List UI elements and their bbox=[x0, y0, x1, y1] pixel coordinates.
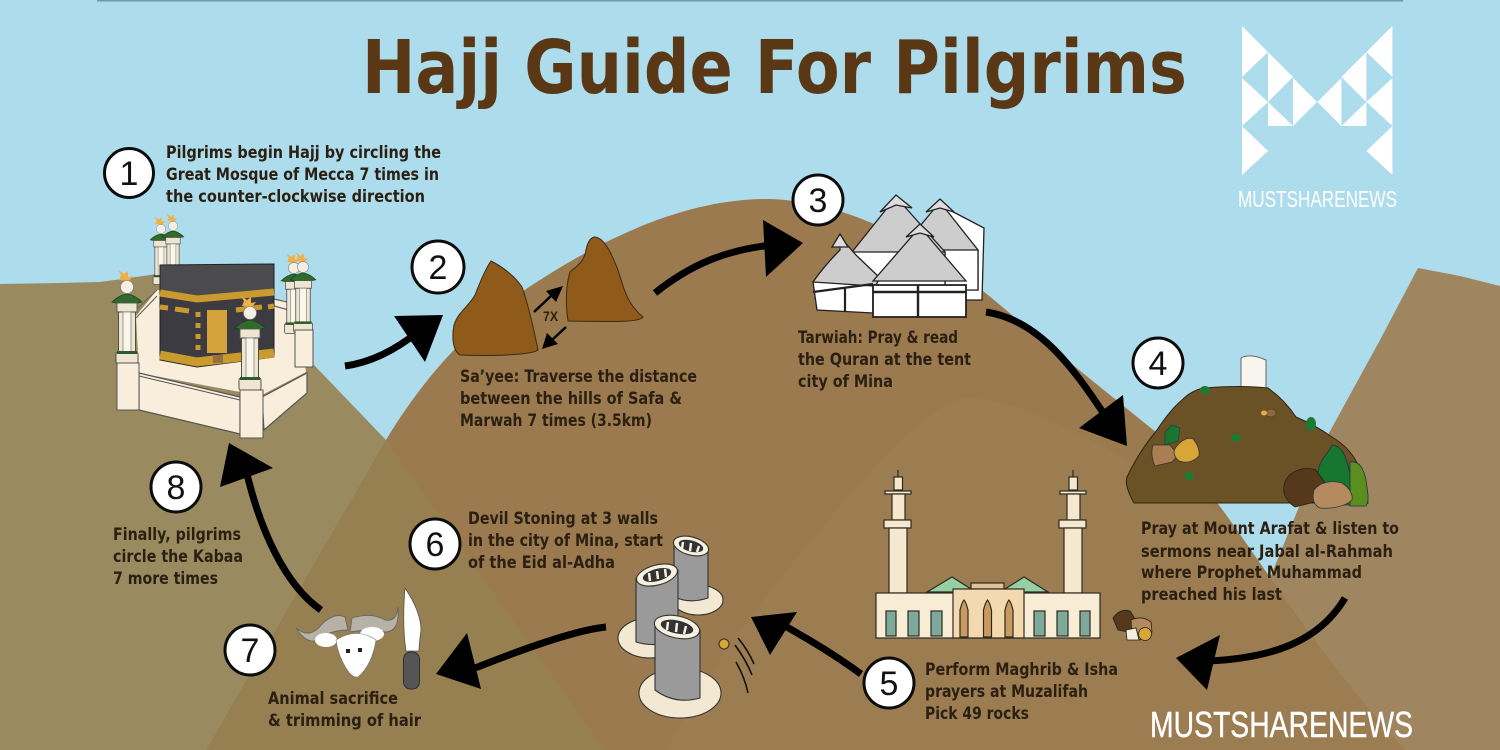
icon: Mount Arafat bbox=[1126, 356, 1368, 508]
step 3 number bbox=[793, 175, 843, 225]
arrow 2 to 3 bbox=[655, 220, 803, 293]
step 8 text: 7 more times bbox=[113, 569, 218, 588]
step 3 text: Tarwiah: Pray & read bbox=[798, 328, 958, 347]
icon: tent city of Mina bbox=[813, 195, 984, 317]
step 1 number: 1 bbox=[120, 155, 138, 193]
arrow 5 to 6 bbox=[751, 612, 861, 674]
step 1 text: Great Mosque of Mecca 7 times in bbox=[166, 165, 439, 184]
arrow 7 to 8 bbox=[220, 443, 321, 610]
step 2 number: 2 bbox=[429, 249, 447, 287]
cube bbox=[160, 264, 274, 296]
step 5 number: 5 bbox=[880, 665, 898, 703]
step 3 text: city of Mina bbox=[798, 372, 893, 391]
logo: MustShareNews emblem bbox=[1238, 26, 1397, 212]
step 1 number bbox=[104, 148, 154, 198]
step 5 text: prayers at Muzalifah bbox=[925, 682, 1088, 701]
step 6 number bbox=[410, 519, 460, 569]
logo: MustShareNews emblem: MUSTSHARENEWS bbox=[1238, 186, 1397, 212]
logo: MustShareNews wordmark: MUSTSHARENEWS bbox=[1150, 704, 1413, 745]
step 1 text: Pilgrims begin Hajj by circling the bbox=[166, 143, 441, 162]
step 6 text bbox=[468, 509, 663, 572]
icon: sacrificial animal and knife bbox=[296, 588, 421, 689]
step 2 text: between the hills of Safa & bbox=[460, 389, 682, 408]
step 4 number: 4 bbox=[1149, 345, 1167, 383]
step 6 text: in the city of Mina, start bbox=[468, 531, 663, 550]
title: Hajj Guide For Pilgrims bbox=[362, 25, 1187, 111]
step 7 text: Animal sacrifice bbox=[268, 689, 398, 708]
step 7 text: & trimming of hair bbox=[268, 711, 422, 730]
step 7 number bbox=[225, 625, 275, 675]
step 5 text: Pick 49 rocks bbox=[925, 704, 1029, 723]
arrow 1 to 2 bbox=[345, 315, 443, 366]
left hill bbox=[0, 268, 420, 750]
step 1 text bbox=[166, 143, 441, 206]
step 8 number bbox=[151, 462, 201, 512]
step 1 text: the counter-clockwise direction bbox=[166, 187, 425, 206]
step 4 text: preached his last bbox=[1141, 585, 1282, 604]
arrow 6 to 7 bbox=[436, 627, 606, 689]
lower inner hill bbox=[667, 398, 1405, 750]
step 4 text bbox=[1141, 519, 1399, 604]
step 6 text: of the Eid al-Adha bbox=[468, 553, 615, 572]
icon: hills of Safa and Marwah: 7X bbox=[543, 308, 559, 324]
step 5 text: Perform Maghrib & Isha bbox=[925, 660, 1118, 679]
step 6 text: Devil Stoning at 3 walls bbox=[468, 509, 658, 528]
step 7 number: 7 bbox=[241, 632, 259, 670]
step 8 text: Finally, pilgrims bbox=[113, 525, 241, 544]
step 8 text: circle the Kabaa bbox=[113, 547, 243, 566]
step 3 text: the Quran at the tent bbox=[798, 350, 971, 369]
icon: mosque at Muzdalifah bbox=[876, 470, 1100, 638]
front olive hill bbox=[206, 440, 605, 750]
step 3 number: 3 bbox=[809, 182, 827, 220]
step 4 number bbox=[1133, 338, 1183, 388]
step 7 text bbox=[268, 689, 422, 730]
step 3 text bbox=[798, 328, 971, 391]
icon: stoning walls bbox=[618, 533, 754, 718]
step 4 text: where Prophet Muhammad bbox=[1141, 563, 1362, 582]
arrow 4 to 5 bbox=[1176, 598, 1345, 690]
step 8 text bbox=[113, 525, 243, 588]
walls bbox=[139, 373, 240, 434]
step 2 text: Sa’yee: Traverse the distance bbox=[460, 367, 697, 386]
step 6 number: 6 bbox=[426, 526, 444, 564]
step 2 number bbox=[412, 241, 464, 293]
step 8 number: 8 bbox=[167, 469, 185, 507]
arrow 3 to 4 bbox=[986, 312, 1127, 446]
step 4 text: Pray at Mount Arafat & listen to bbox=[1141, 519, 1399, 538]
icon: hills of Safa and Marwah bbox=[453, 237, 643, 355]
step 5 number bbox=[864, 658, 914, 708]
icon: pile of rocks bbox=[1113, 610, 1152, 640]
step 2 text: Marwah 7 times (3.5km) bbox=[460, 411, 652, 430]
step 4 text: sermons near Jabal al-Rahmah bbox=[1141, 542, 1393, 561]
icon: Kaaba and Great Mosque bbox=[112, 214, 316, 438]
right hill bbox=[1200, 268, 1500, 750]
central hill bbox=[240, 199, 1405, 750]
step 2 text bbox=[460, 367, 697, 430]
step 5 text bbox=[925, 660, 1118, 723]
